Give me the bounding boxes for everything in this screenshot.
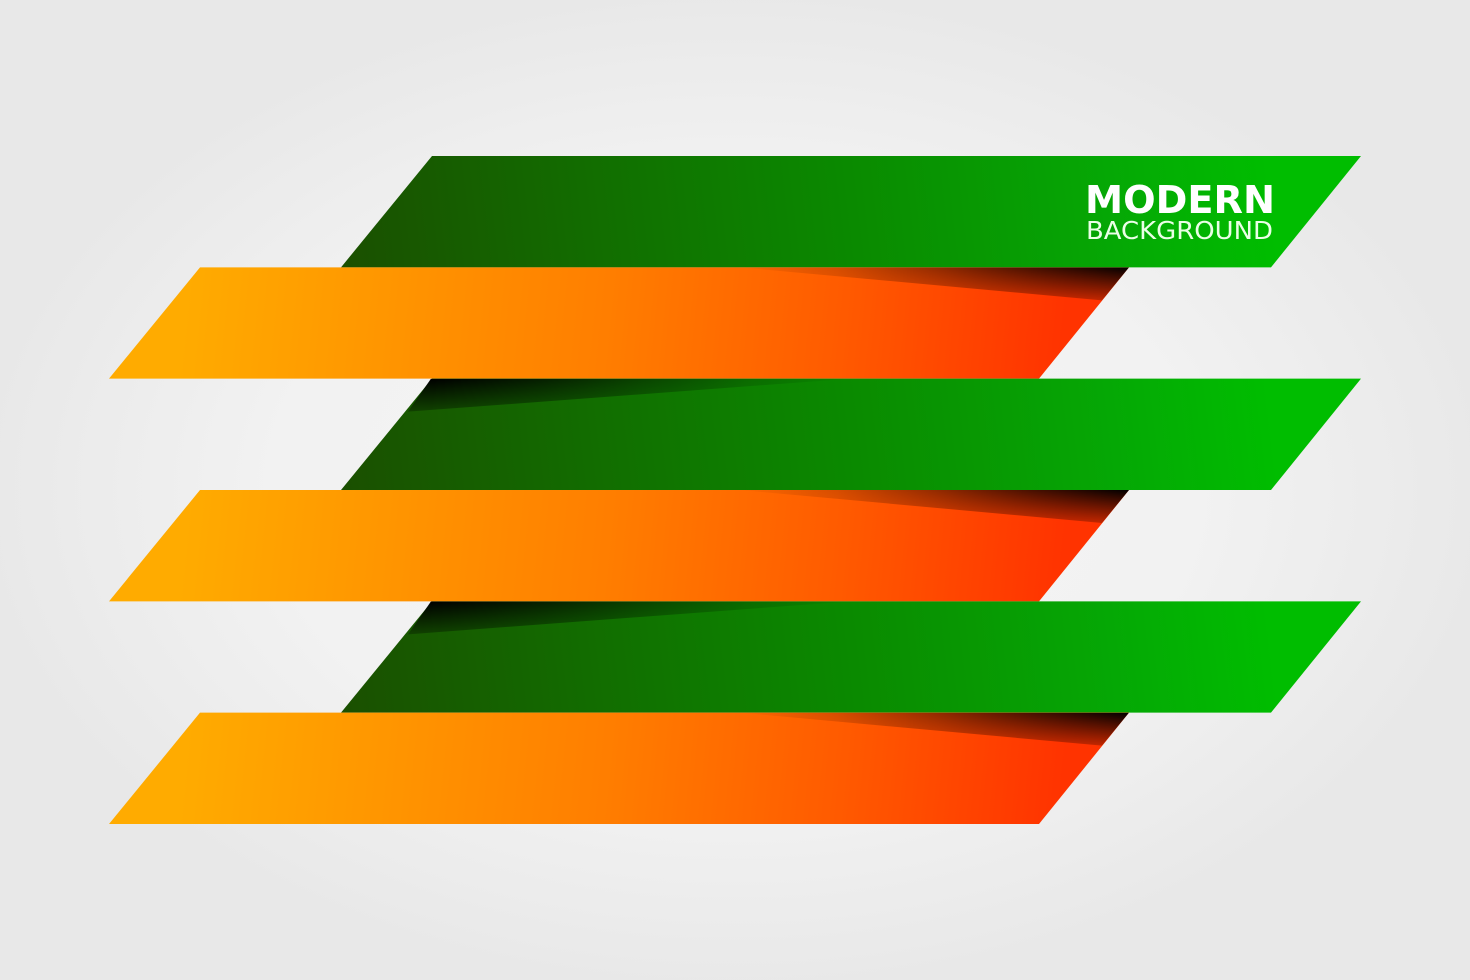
title: modern background xyxy=(1085,178,1275,245)
orange band 3 xyxy=(109,713,1129,824)
subheading: background: BACKGROUND xyxy=(1086,216,1273,245)
green band 3 xyxy=(341,601,1361,713)
orange band 1 xyxy=(109,267,1129,379)
green band 1 xyxy=(341,156,1361,267)
green band 2 xyxy=(341,379,1361,490)
infographic canvas xyxy=(109,156,1361,824)
orange band 2 xyxy=(109,490,1129,601)
heading: modern: MODERN xyxy=(1085,178,1275,222)
